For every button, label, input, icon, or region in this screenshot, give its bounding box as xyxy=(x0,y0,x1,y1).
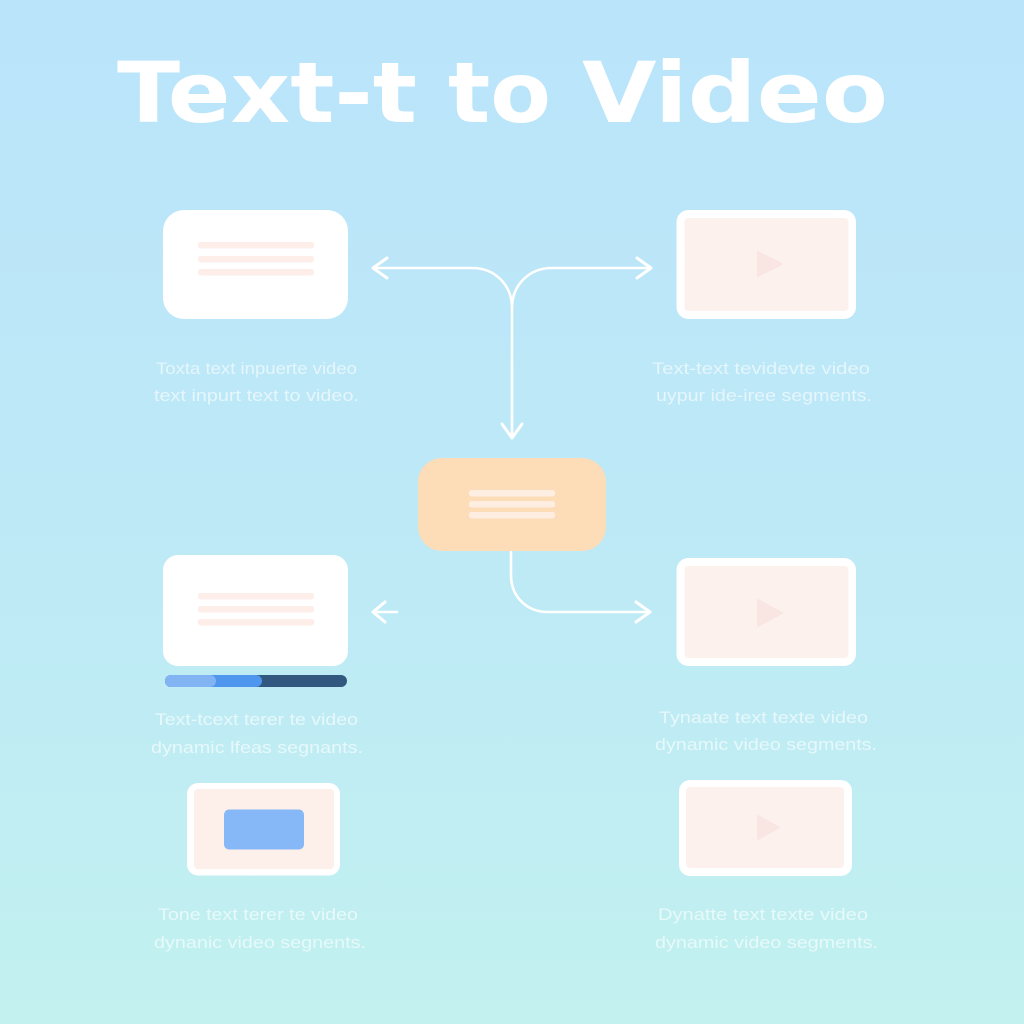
panel: bottom left video card xyxy=(187,783,340,876)
caption: middle left xyxy=(151,711,363,757)
caption: bottom left: dynanic video segnents. xyxy=(154,934,366,952)
panel: top right video card xyxy=(676,210,856,319)
caption: bottom right: Dynatte text texte video xyxy=(658,906,868,924)
caption: top right xyxy=(652,360,872,405)
title: to xyxy=(448,44,551,142)
arrow: centre to lower right xyxy=(511,552,650,622)
panel: bottom right video card xyxy=(679,780,852,876)
caption: middle left: dynamic lfeas segnants. xyxy=(151,739,363,757)
caption: bottom left xyxy=(154,906,366,952)
title xyxy=(117,44,888,142)
caption: middle right: dynamic video segments. xyxy=(655,736,877,754)
caption: bottom right xyxy=(655,906,878,952)
panel: top left text card xyxy=(163,210,348,319)
title: Video xyxy=(582,44,888,142)
caption: top right: uypur ide-iree segments. xyxy=(656,387,872,405)
caption: middle left: Text-tcext terer te video xyxy=(155,711,358,729)
icon: play triangle xyxy=(758,816,779,839)
title: Text-t xyxy=(117,44,417,142)
blue block xyxy=(224,810,304,850)
arrows: split from centre to top cards and down xyxy=(373,258,651,438)
panel: central orange card xyxy=(418,458,606,551)
caption: top left: Toxta text inpuerte video xyxy=(156,360,357,378)
panel: middle left text card xyxy=(163,555,348,666)
icon: play triangle xyxy=(758,252,782,276)
caption: bottom left: Tone text terer te video xyxy=(158,906,358,924)
caption: middle right: Tynaate text texte video xyxy=(659,709,868,727)
icon: play triangle xyxy=(758,600,782,626)
caption: top left: text inpurt text to video. xyxy=(154,387,359,405)
arrow: short left xyxy=(373,602,397,622)
caption: top left xyxy=(154,360,359,405)
progress bar xyxy=(165,675,347,687)
caption: bottom right: dynamic video segments. xyxy=(655,934,878,952)
panel: middle right video card xyxy=(676,558,856,666)
caption: middle right xyxy=(655,709,877,754)
caption: top right: Text-text tevidevte video xyxy=(652,360,870,378)
